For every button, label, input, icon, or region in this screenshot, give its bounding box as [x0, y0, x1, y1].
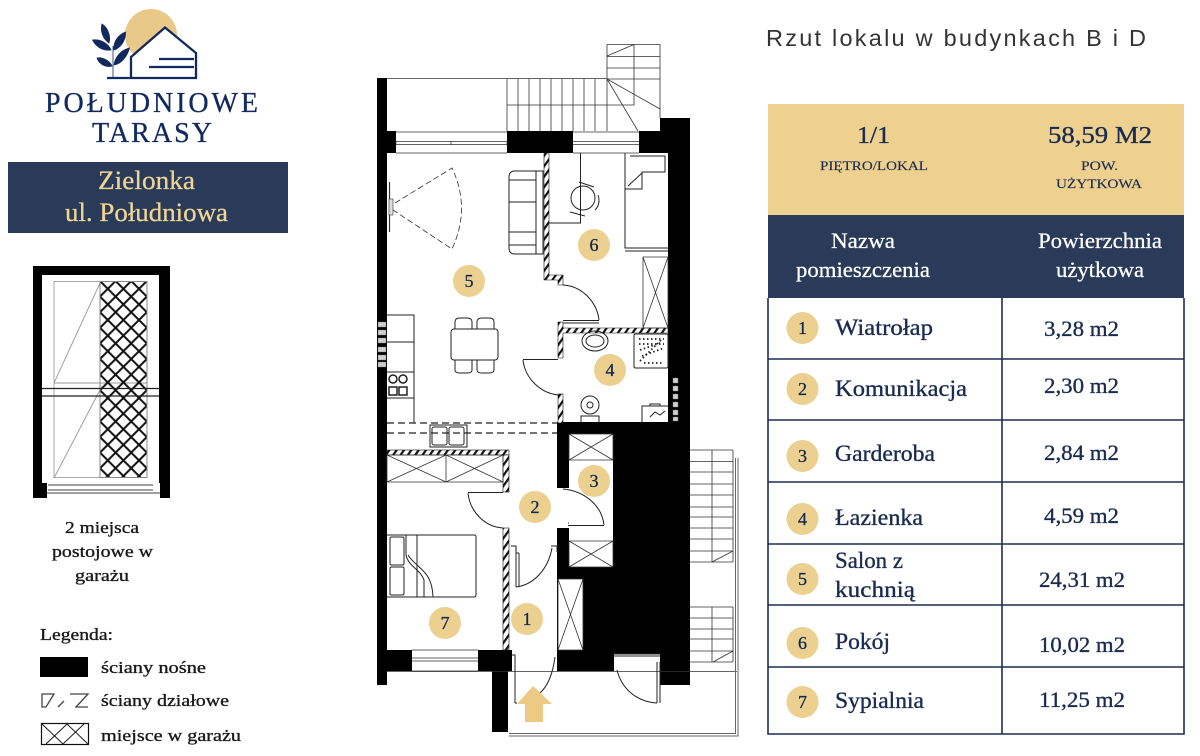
row 3 — [786, 440, 1119, 472]
column header: usable area: Powierzchnia — [1038, 228, 1162, 253]
row 2: 2,30 m2 — [1044, 373, 1119, 398]
row 6 — [786, 627, 1125, 659]
row 2 — [786, 373, 1119, 405]
row 4: Łazienka — [835, 505, 923, 530]
terrace stairs right — [690, 450, 733, 662]
room marker 6: 6 — [590, 235, 598, 255]
row 7: Sypialnia — [835, 688, 924, 713]
legend title: Legenda: — [40, 625, 113, 644]
doors — [468, 285, 660, 703]
row 1: 3,28 m2 — [1044, 316, 1119, 341]
logo wordmark line 2: TARASY — [92, 118, 212, 149]
column header: usable area — [1038, 228, 1162, 282]
floor plan — [377, 44, 738, 736]
total area label: POW. — [1081, 158, 1118, 173]
desk and chair — [549, 153, 599, 223]
row 5: kuchnią — [835, 577, 916, 602]
entrance arrow — [517, 686, 552, 722]
row 6: 6 — [798, 633, 807, 653]
column header: room name: pomieszczenia — [796, 257, 930, 282]
room marker 1: 1 — [522, 609, 532, 629]
partition walls — [387, 153, 668, 650]
load-bearing walls — [377, 78, 690, 732]
terrace railing — [509, 458, 738, 736]
room marker 5 — [453, 265, 485, 297]
floor/unit label: PIĘTRO/LOKAL — [820, 158, 928, 173]
row 1: 1 — [798, 318, 807, 338]
table header — [768, 215, 1184, 298]
legend item: load-bearing walls — [40, 657, 206, 677]
row 7 — [786, 686, 1125, 718]
column header: room name — [796, 228, 930, 282]
column header: room name: Nazwa — [831, 228, 895, 253]
room marker 3 — [578, 465, 610, 497]
room marker 5: 5 — [464, 271, 474, 291]
icon: house — [107, 28, 196, 78]
parking caption: postojowe w — [52, 542, 154, 561]
windows — [387, 132, 737, 672]
row 5: 5 — [798, 569, 807, 589]
row 1: Wiatrołap — [835, 315, 933, 340]
row 5 — [786, 548, 1125, 602]
TV with viewing cone — [389, 168, 462, 249]
garage plan — [33, 266, 170, 498]
row 4: 4,59 m2 — [1044, 503, 1119, 528]
room marker 3: 3 — [590, 471, 598, 491]
row 3: Garderoba — [835, 441, 935, 466]
terrace stairs top — [387, 44, 660, 131]
location banner — [8, 162, 288, 233]
row 2: Komunikacja — [835, 376, 967, 401]
parking caption: garażu — [75, 566, 130, 585]
room marker 2 — [519, 491, 551, 523]
floor/unit number: 1/1 — [857, 123, 890, 149]
parking caption — [52, 518, 154, 585]
row 6: Pokój — [835, 629, 890, 654]
banner city: Zielonka — [98, 166, 195, 195]
row 1 — [786, 312, 1119, 344]
bed in room 7 — [387, 535, 476, 597]
banner street: ul. Południowa — [65, 198, 228, 227]
room marker 7: 7 — [440, 613, 450, 633]
icon: sun — [125, 9, 177, 61]
row 4: 4 — [798, 509, 807, 529]
parking caption: 2 miejsca — [65, 518, 140, 537]
legend item: load-bearing walls: ściany nośne — [101, 658, 206, 677]
sofa — [509, 171, 543, 254]
dining table — [451, 318, 498, 373]
room marker 1 — [511, 603, 543, 635]
room marker 2: 2 — [530, 497, 540, 517]
room marker 6 — [578, 229, 610, 261]
legend item: partition walls: ściany działowe — [101, 691, 229, 710]
logo wordmark line 1: POŁUDNIOWE — [45, 88, 258, 119]
row 6: 10,02 m2 — [1039, 632, 1125, 657]
table grid — [768, 298, 1184, 734]
row 5: 24,31 m2 — [1039, 567, 1125, 592]
row 2: 2 — [798, 379, 807, 399]
room marker 4: 4 — [606, 360, 614, 380]
heading: Rzut lokalu w budynkach B i D — [766, 25, 1146, 51]
total area: 58,59 M2 — [1048, 123, 1152, 149]
row 4 — [786, 503, 1119, 535]
row 3: 3 — [798, 446, 807, 466]
legend item: garage space — [42, 724, 242, 745]
kitchen counter — [387, 315, 557, 447]
summary panel — [768, 104, 1184, 215]
total area label — [1056, 158, 1143, 191]
column header: usable area: użytkowa — [1056, 257, 1144, 282]
logo: Południowe Tarasy — [45, 9, 258, 149]
wall fixtures — [378, 322, 678, 421]
row 5: Salon z — [835, 548, 903, 573]
legend item: garage space: miejsce w garażu — [101, 726, 242, 745]
closets and openings cut out of mass — [557, 434, 660, 671]
legend item: partition walls — [42, 691, 229, 710]
bathroom fixtures — [581, 331, 668, 423]
row 7: 7 — [798, 692, 807, 712]
room marker 7 — [429, 607, 461, 639]
legend — [40, 625, 242, 745]
bed in room 6 — [625, 153, 668, 251]
wardrobes — [387, 257, 668, 650]
row 3: 2,84 m2 — [1044, 440, 1119, 465]
room marker 4 — [594, 354, 626, 386]
total area label: UŻYTKOWA — [1056, 176, 1143, 191]
row 7: 11,25 m2 — [1039, 687, 1125, 712]
icon: plant — [92, 24, 130, 78]
